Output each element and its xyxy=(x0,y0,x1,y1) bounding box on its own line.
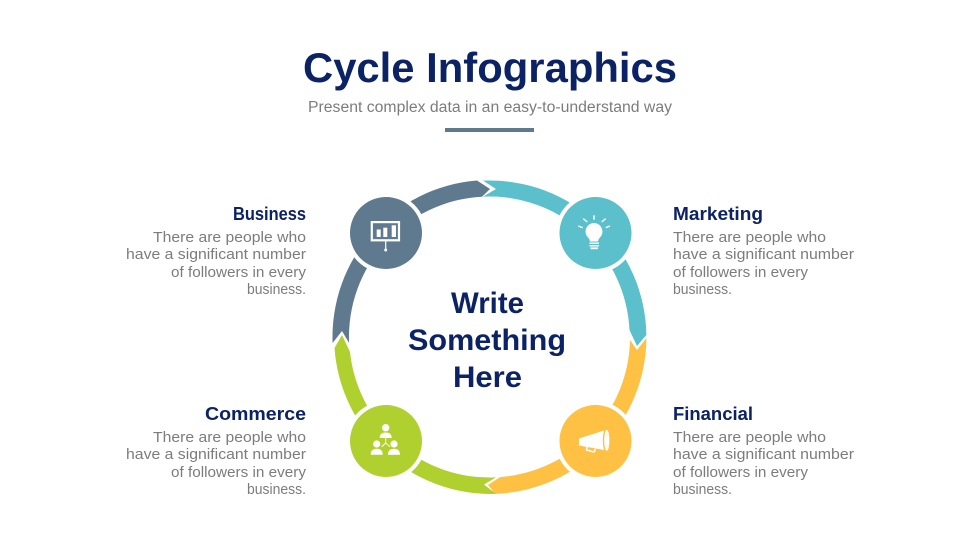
center text: Write xyxy=(451,287,524,320)
arc: marketing arrow xyxy=(483,180,646,346)
text: commerce description: There are people who xyxy=(153,430,306,446)
text: financial description xyxy=(673,430,854,498)
node: commerce xyxy=(346,401,426,481)
panel: business xyxy=(126,204,307,298)
text: commerce description: have a significant number xyxy=(126,447,306,463)
text: business description: have a significant number xyxy=(126,247,306,263)
icon: team hierarchy xyxy=(371,424,400,455)
subtitle: Present complex data in an easy-to-understand way xyxy=(308,99,672,116)
heading: business: Business xyxy=(233,204,306,224)
arc: financial arrow xyxy=(488,338,646,494)
text: business description: of followers in every xyxy=(171,265,307,281)
center text xyxy=(408,287,566,394)
center text: Something xyxy=(408,324,566,357)
text: marketing description: have a significant number xyxy=(673,247,854,263)
text: marketing description: There are people who xyxy=(673,230,826,246)
text: business description: business. xyxy=(247,282,306,298)
text: financial description: have a significant number xyxy=(673,447,854,463)
icon: light bulb xyxy=(578,215,610,249)
text: commerce description xyxy=(126,430,307,498)
panel: financial xyxy=(673,404,854,498)
node: financial xyxy=(556,401,636,481)
center text: Here xyxy=(453,361,522,394)
cycle ring xyxy=(332,180,646,494)
heading: marketing: Marketing xyxy=(673,204,763,224)
text: marketing description: business. xyxy=(673,282,732,298)
panel: marketing xyxy=(673,204,854,298)
icon: presentation board xyxy=(372,222,399,252)
heading: commerce: Commerce xyxy=(205,404,306,424)
text: marketing description: of followers in every xyxy=(673,265,809,281)
arc: business arrow xyxy=(332,180,490,343)
text: commerce description: of followers in every xyxy=(171,465,307,481)
text: business description xyxy=(126,230,307,298)
icon: megaphone xyxy=(579,430,609,452)
heading: financial: Financial xyxy=(673,404,753,424)
text: commerce description: business. xyxy=(247,482,306,498)
text: marketing description xyxy=(673,230,854,298)
divider xyxy=(445,128,534,132)
text: business description: There are people who xyxy=(153,230,306,246)
title: Cycle Infographics xyxy=(303,44,677,91)
arc: commerce arrow xyxy=(334,335,496,494)
panel: commerce xyxy=(126,404,307,498)
text: financial description: business. xyxy=(673,482,732,498)
node: marketing xyxy=(556,193,636,273)
text: financial description: of followers in every xyxy=(673,465,809,481)
text: financial description: There are people who xyxy=(673,430,826,446)
node: business xyxy=(346,193,426,273)
